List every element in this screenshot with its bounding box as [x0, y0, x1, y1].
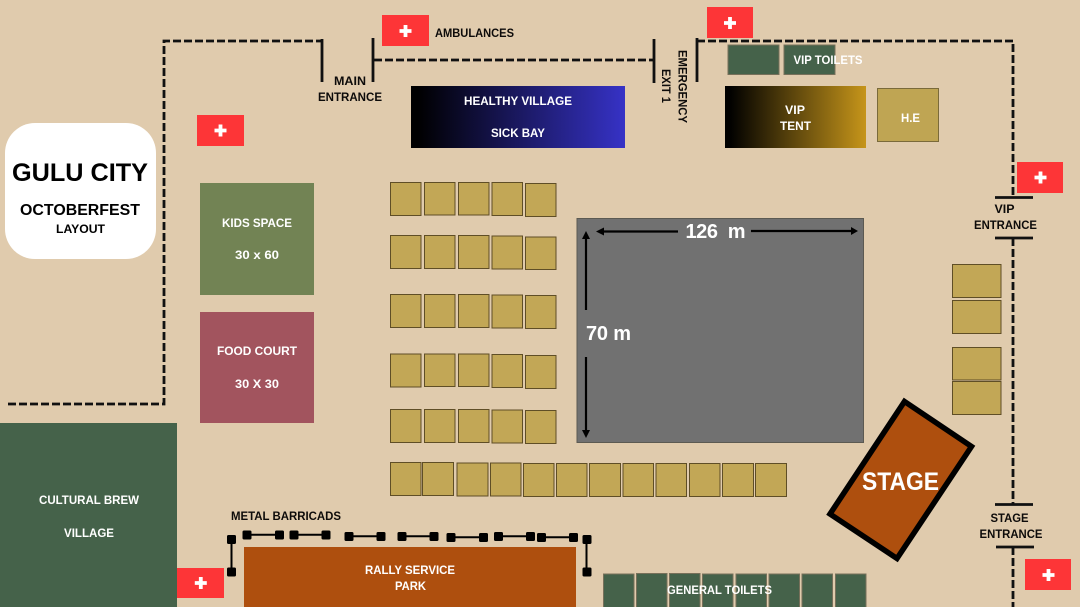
panel: VIP tent: VIP [785, 105, 805, 117]
booths: row 3 [390, 294, 556, 328]
booths: row 4 [390, 354, 556, 388]
booths: east side [952, 264, 1001, 414]
stage: STAGE [862, 468, 939, 496]
panel: healthy village sick bay: HEALTHY VILLAGE [464, 96, 572, 108]
panel: H.E: H.E [901, 113, 920, 125]
main entrance gate: ENTRANCE [318, 92, 382, 104]
panel: kids space [200, 183, 314, 295]
medical marker: south east [1025, 559, 1071, 590]
metal barricades label: METAL BARRICADS [231, 511, 341, 523]
height arrow [585, 237, 587, 433]
metal barricades [227, 530, 592, 576]
booths: bottom row [390, 462, 786, 496]
title: GULU CITY [12, 159, 148, 187]
width label: 126 m [686, 221, 746, 243]
booths: row 2 [390, 236, 556, 270]
panel: rally service park [244, 547, 576, 607]
perimeter fence: ambulance lane [374, 59, 654, 61]
panel: VIP toilets: VIP TOILETS [794, 55, 863, 67]
emergency exit gate: EXIT 1 [659, 69, 671, 104]
stage entrance gate: ENTRANCE [980, 529, 1043, 541]
panel: cultural brew village [0, 423, 177, 607]
panel: food court: 30 X 30 [235, 379, 279, 391]
panel: VIP tent [725, 86, 866, 148]
main entrance gate: MAIN [334, 76, 366, 88]
emergency exit gate [654, 38, 697, 123]
height label: 70 m [586, 323, 631, 345]
layout label: LAYOUT [56, 222, 106, 236]
panel: kids space: 30 x 60 [235, 250, 279, 262]
arena with dimensions [577, 218, 864, 442]
perimeter fence: north east [697, 41, 1013, 197]
VIP entrance gate: VIP [994, 204, 1015, 216]
panel: H.E [878, 88, 938, 142]
medical marker: emergency exit [707, 7, 753, 38]
medical marker: south west [177, 568, 224, 598]
stage entrance gate: STAGE [990, 513, 1029, 525]
title panel [5, 123, 156, 259]
perimeter fence: east [1012, 238, 1014, 504]
panel: food court: FOOD COURT [217, 346, 297, 358]
stage [830, 402, 972, 558]
panel: cultural brew village: VILLAGE [64, 528, 114, 540]
medical marker: VIP entrance [1017, 162, 1063, 193]
perimeter fence: west [8, 41, 322, 404]
VIP entrance gate [974, 198, 1037, 238]
VIP entrance gate: ENTRANCE [974, 220, 1037, 232]
panel: general toilets: GENERAL TOILETS [667, 585, 772, 597]
panel: rally service park: PARK [395, 581, 427, 593]
panel: rally service park: RALLY SERVICE [365, 565, 455, 577]
medical marker: north west [197, 115, 244, 146]
emergency exit gate: EMERGENCY [676, 50, 688, 123]
panel: cultural brew village: CULTURAL BREW [39, 495, 139, 507]
booths: row 5 [390, 410, 556, 444]
perimeter fence: south east [1012, 547, 1014, 607]
panel: general toilets [604, 574, 866, 607]
subtitle: OCTOBERFEST [20, 202, 141, 219]
panel: food court [200, 312, 314, 423]
panel: VIP toilets [728, 45, 863, 74]
panel: healthy village sick bay [411, 86, 625, 148]
main entrance gate [318, 38, 382, 104]
panel: healthy village sick bay: SICK BAY [491, 128, 545, 140]
medical marker: ambulances [382, 15, 429, 46]
width arrow [600, 230, 853, 233]
ambulances label: AMBULANCES [435, 28, 514, 40]
panel: VIP tent: TENT [780, 121, 811, 133]
panel: kids space: KIDS SPACE [222, 218, 292, 230]
stage entrance gate [980, 504, 1043, 547]
booths: row 1 [390, 182, 556, 216]
